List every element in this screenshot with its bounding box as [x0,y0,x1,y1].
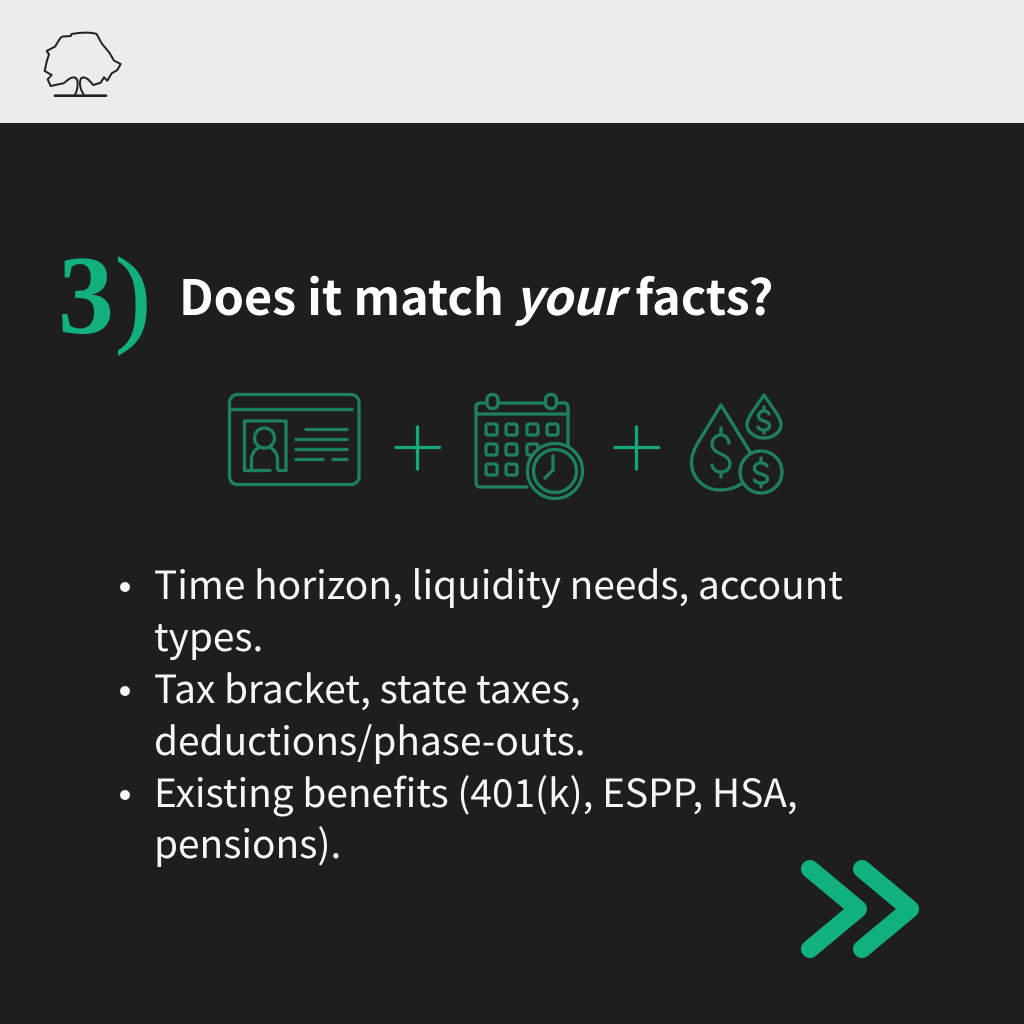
icon: id card [230,394,359,484]
bullet text 2: Tax bracket, state taxes, [154,659,581,715]
title: Does it match your facts? [179,259,773,329]
step number [58,240,151,358]
bullet text 3: pensions). [154,814,341,870]
bullet 1 [120,582,130,592]
bullet 3 [120,790,130,800]
icon: plus [396,427,440,469]
bullet text 1 [154,555,843,663]
bullet text 1: types. [154,607,263,663]
header band [0,0,1024,123]
bullet text 2: deductions/phase-outs. [154,711,586,767]
icon: plus [615,427,658,469]
bullet 2 [120,686,130,696]
icon: tree logo [44,32,122,97]
step number: ) [115,240,151,356]
icon: calendar with clock [476,394,582,498]
bullet text 1: Time horizon, liquidity needs, account [154,555,843,611]
bullet list [120,555,843,870]
bullet text 3: Existing benefits (401(k), ESPP, HSA, [154,762,798,818]
bullet text 2 [154,659,586,767]
bullet text 3 [154,762,798,870]
icon: money drops [692,395,782,493]
